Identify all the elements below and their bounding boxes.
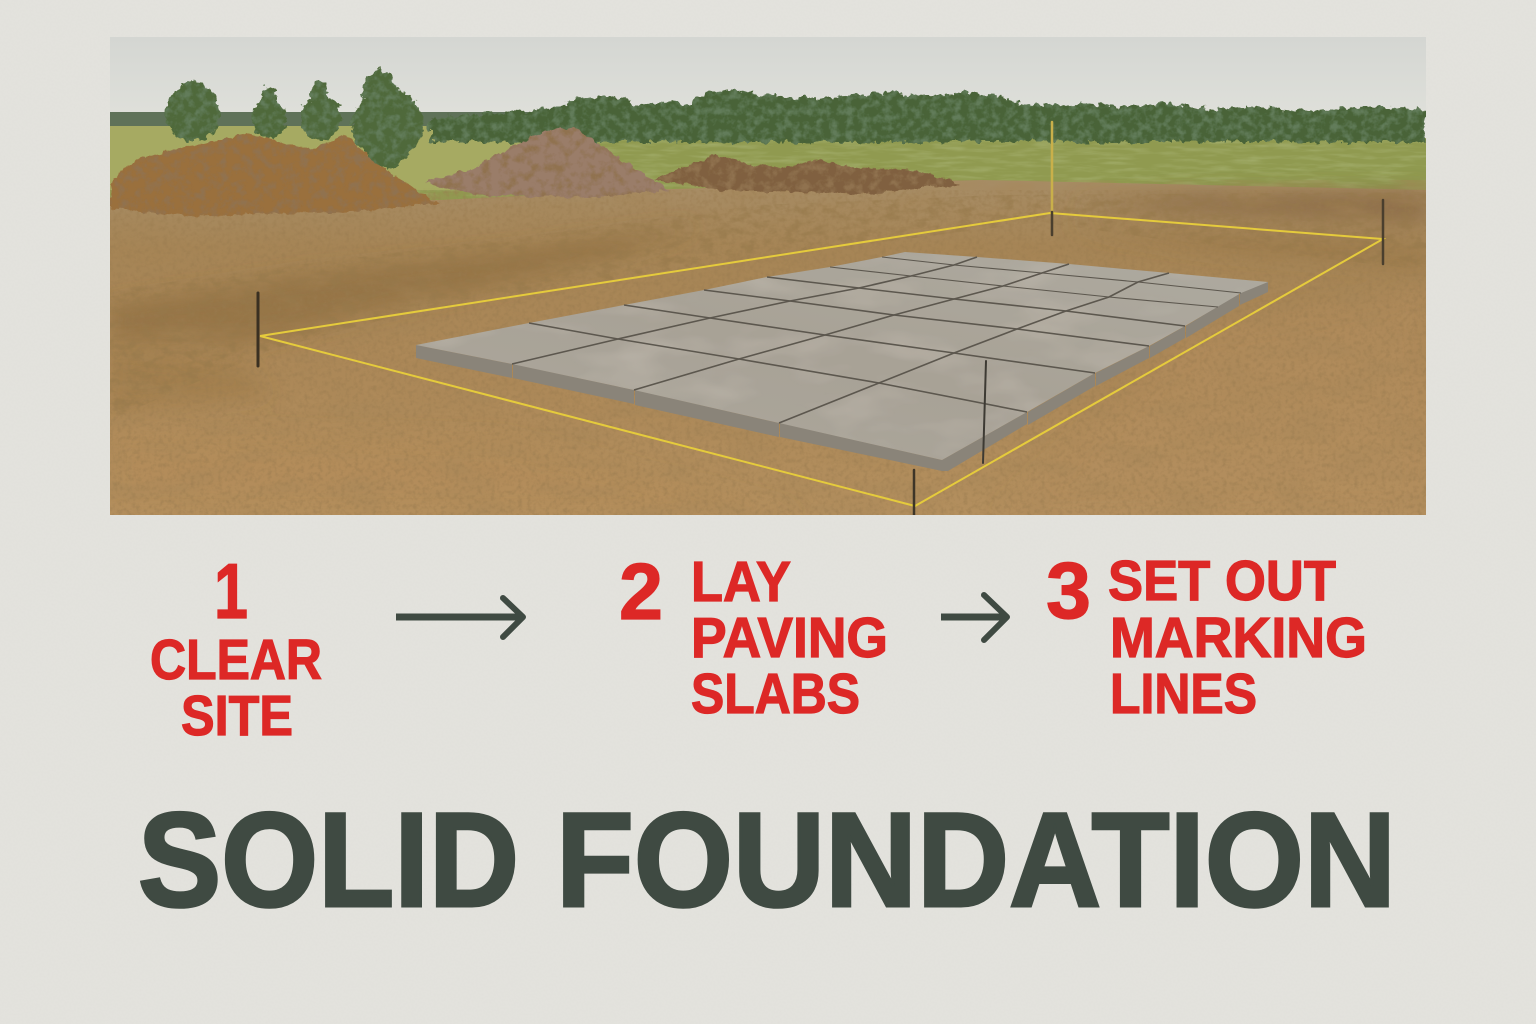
yellow marking string lines xyxy=(260,213,1383,506)
field texture xyxy=(110,138,1426,198)
title xyxy=(138,786,1396,935)
arrow: step 2 to step 3 xyxy=(941,595,1007,640)
step 3: set out marking lines: SET OUT xyxy=(1108,549,1336,613)
step 1: clear site: 1 xyxy=(214,547,248,635)
arrow: step 1 to step 2 xyxy=(396,598,523,637)
soil pile: grey gravel mound xyxy=(425,128,668,197)
step 2: lay paving slabs: PAVING xyxy=(691,606,888,670)
step 1: clear site: SITE xyxy=(181,684,293,748)
soil texture xyxy=(110,180,1426,515)
title: SOLID xyxy=(138,786,519,935)
young trees xyxy=(165,70,424,168)
distant tree band xyxy=(110,112,532,126)
soil pile: brown mound xyxy=(110,133,438,216)
ground xyxy=(110,180,1426,515)
light grass behind the piles xyxy=(110,126,560,190)
step 3: set out marking lines: 3 xyxy=(1046,546,1091,635)
tree line xyxy=(430,90,1426,142)
sky xyxy=(110,37,1426,88)
soil shading and ridges xyxy=(110,183,1426,402)
step 2: lay paving slabs: LAY xyxy=(691,550,791,614)
slab top surface xyxy=(416,252,1268,460)
paving slabs xyxy=(416,252,1268,471)
green field xyxy=(110,138,1426,200)
step 2: lay paving slabs: SLABS xyxy=(691,662,860,726)
step 2: lay paving slabs xyxy=(619,547,888,726)
soil pile: dark brown mound xyxy=(655,155,960,194)
step 1: clear site xyxy=(150,547,322,748)
stakes xyxy=(258,122,1383,515)
step 3: set out marking lines: LINES xyxy=(1110,662,1257,726)
step 3: set out marking lines xyxy=(1046,546,1367,726)
slab side faces xyxy=(416,282,1268,471)
photo: construction site with paving slabs xyxy=(110,37,1426,515)
step 1: clear site: CLEAR xyxy=(150,628,322,692)
slab joints xyxy=(512,257,1241,423)
step 3: set out marking lines: MARKING xyxy=(1110,606,1367,670)
title: FOUNDATION xyxy=(556,786,1396,935)
step 2: lay paving slabs: 2 xyxy=(619,547,663,636)
